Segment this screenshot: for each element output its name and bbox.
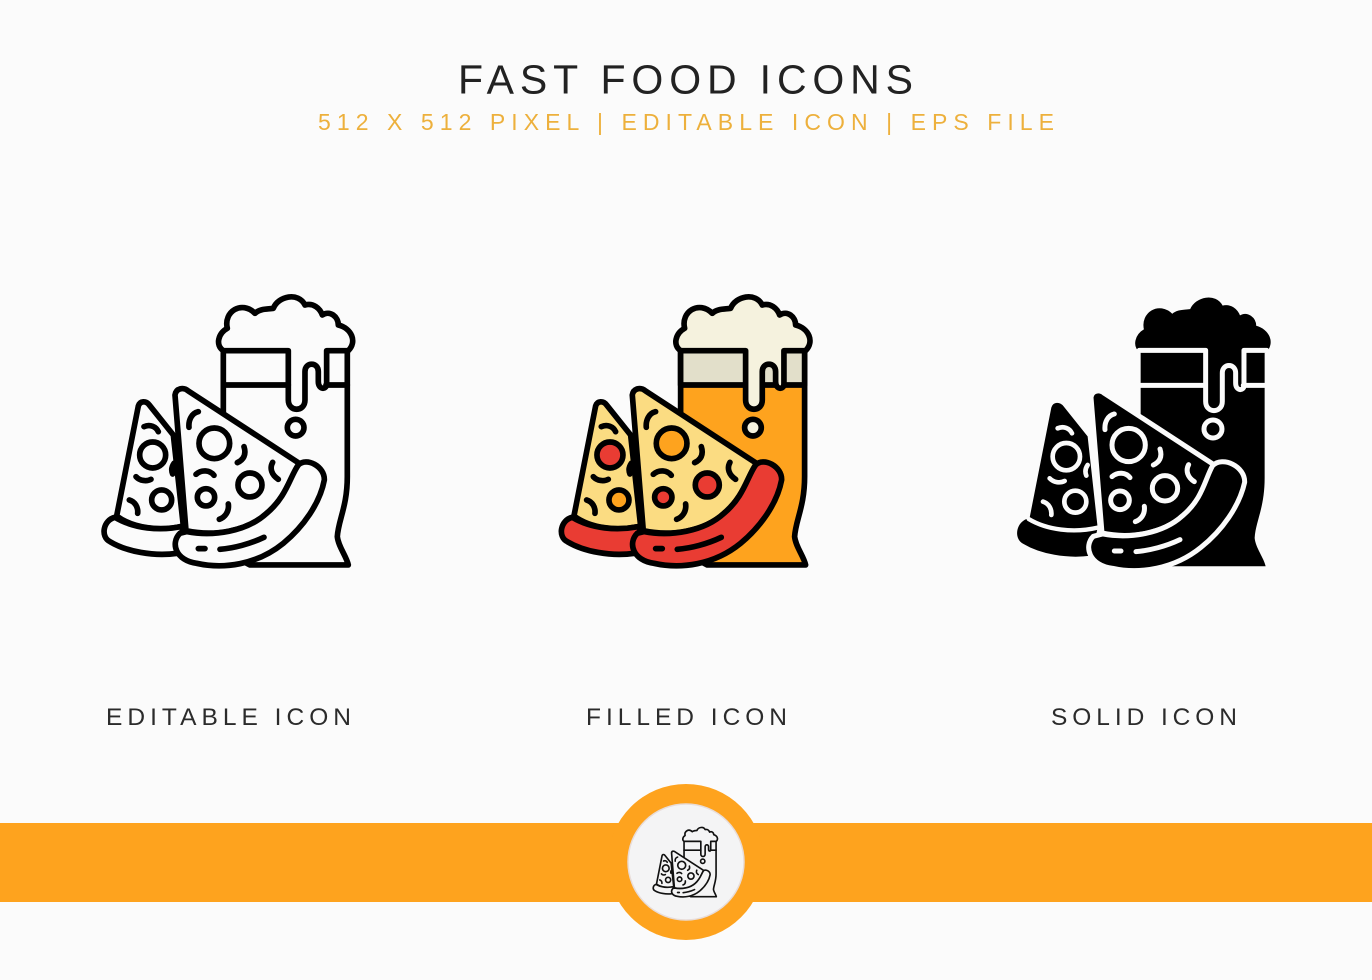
title: FAST FOOD ICONS	[458, 56, 913, 102]
icon: small badge outline	[653, 827, 717, 897]
label: solid icon: SOLID ICON	[1051, 704, 1237, 731]
footer orange band	[0, 823, 1372, 902]
subtitle: 512 X 512 PIXEL | EDITABLE ICON | EPS FILE	[318, 109, 1054, 135]
icon: solid black pizza and beer	[1018, 298, 1270, 571]
label: filled icon: FILLED ICON	[586, 704, 787, 731]
badge inner circle	[628, 804, 744, 920]
icon: filled colour pizza and beer	[561, 297, 810, 566]
label: editable icon: EDITABLE ICON	[106, 704, 351, 731]
badge ring	[608, 784, 764, 940]
icon: editable outline pizza and beer	[104, 297, 353, 566]
